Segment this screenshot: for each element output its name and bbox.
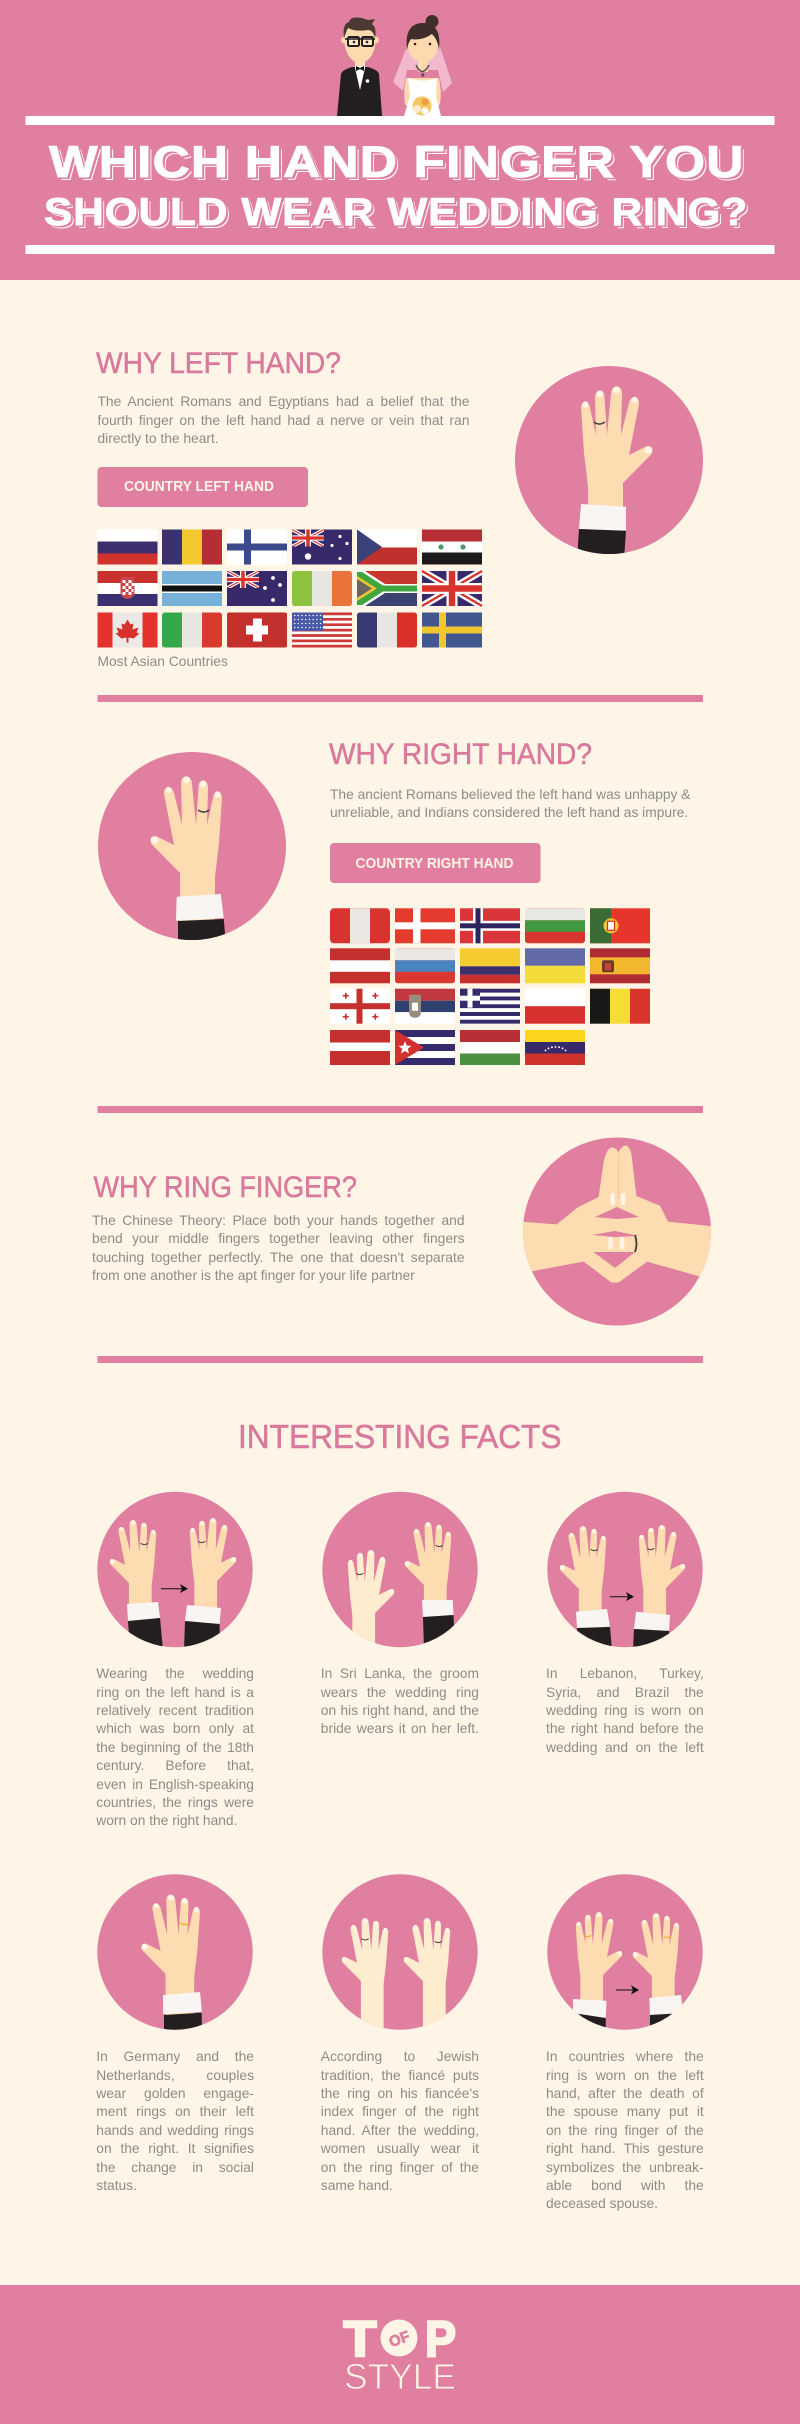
flag: Russia xyxy=(395,948,455,983)
button: country right hand xyxy=(330,843,540,883)
flag: Czech Republic xyxy=(357,530,417,564)
text: fact six: symbolizes the unbreak- xyxy=(546,2160,704,2175)
text: why right hand explanation xyxy=(330,786,710,823)
icon: hand with gold ring xyxy=(97,1874,253,2030)
flag: Botswana xyxy=(162,571,222,606)
panel: interesting facts xyxy=(96,1418,704,2215)
flag: Switzerland xyxy=(227,612,287,648)
flag: Ukraine xyxy=(525,948,585,983)
flag: Italy xyxy=(162,612,222,648)
icon: two hands with arrow xyxy=(97,1492,253,1659)
title xyxy=(0,130,800,242)
divider xyxy=(98,1356,703,1363)
text: fact four: on the right. It signifies xyxy=(96,2141,254,2156)
icon: right hand circle xyxy=(98,752,286,940)
text: fact five: women usually wear it xyxy=(321,2141,479,2156)
icon: bride xyxy=(393,15,452,116)
flag: Austria xyxy=(330,1030,390,1065)
text: chinese theory: from one another is the apt finger for your life partner xyxy=(92,1268,415,1283)
icon: bride and groom hands xyxy=(322,1492,478,1648)
flag: United Kingdom xyxy=(422,571,482,606)
text: fact five: on the ring finger of the xyxy=(321,2160,479,2175)
text: fact one xyxy=(96,1665,254,1833)
text: fact six: ring is worn on the left xyxy=(546,2068,704,2083)
flag: Canada xyxy=(98,612,158,648)
text: fact four xyxy=(96,2048,254,2197)
flag: Syria xyxy=(422,530,482,564)
flag: Peru xyxy=(330,908,390,943)
header banner xyxy=(0,0,800,280)
flag: Cuba xyxy=(395,1030,455,1065)
text: fact five: tradition, the fiancé puts xyxy=(321,2068,479,2083)
top rule xyxy=(26,116,774,125)
flag: Australia xyxy=(292,530,352,564)
icon: left hand circle xyxy=(515,366,703,554)
text: fact one: worn on the right hand. xyxy=(96,1813,237,1828)
title: SHOULD WEAR WEDDING RING? xyxy=(44,191,748,234)
logo: top of style xyxy=(344,2311,456,2397)
fact: germany and netherlands xyxy=(96,1874,254,2197)
text: fact one: which was born only at xyxy=(96,1721,254,1736)
text: fact three: the right hand before the xyxy=(546,1721,704,1736)
fact: lebanon turkey syria brazil xyxy=(546,1492,704,1758)
text: fact two: In Sri Lanka, the groom xyxy=(321,1666,479,1681)
button: country right hand: COUNTRY RIGHT HAND xyxy=(356,856,514,872)
text: fact six: on the ring finger of the xyxy=(546,2123,704,2138)
logo: top of style: P xyxy=(425,2311,456,2367)
text: chinese theory xyxy=(92,1212,464,1287)
flag: Bulgaria xyxy=(525,908,585,943)
text: fact six xyxy=(546,2048,704,2215)
text: fact one: the beginning of the 18th xyxy=(96,1740,254,1755)
text: fact six: deceased spouse. xyxy=(546,2196,658,2211)
text: why right hand explanation: The ancient Romans believed the left hand was unhappy & xyxy=(330,787,690,802)
text: fact one: countries, the rings were xyxy=(96,1795,254,1810)
icon: hands together circle xyxy=(520,1138,715,1326)
icon: two bride hands xyxy=(322,1874,478,2030)
text: fact three xyxy=(546,1665,704,1758)
text: chinese theory: The Chinese Theory: Place both your hands together and xyxy=(92,1213,464,1228)
text: fact four: ment rings on their left xyxy=(96,2104,254,2119)
text: fact two xyxy=(321,1665,479,1740)
flag: Russia xyxy=(98,530,158,564)
flag: Belgium xyxy=(590,989,650,1024)
heading: why right hand: WHY RIGHT HAND? xyxy=(329,738,592,771)
flag: Norway xyxy=(460,908,520,943)
text: fact five: index finger of the right xyxy=(321,2104,479,2119)
text: fact four: hands and wedding rings xyxy=(96,2123,254,2138)
fact: sri lanka xyxy=(321,1492,479,1740)
fact: after death of spouse xyxy=(546,1874,704,2215)
flag: Portugal xyxy=(590,908,650,943)
text: fact one: ring on the left hand is a xyxy=(96,1685,254,1700)
flag: Finland xyxy=(227,530,287,564)
bottom rule xyxy=(26,245,774,254)
text: fact four: In Germany and the xyxy=(96,2049,254,2064)
icon: two hands with arrow xyxy=(547,1492,703,1665)
flag: Denmark xyxy=(395,908,455,943)
flag: Ireland xyxy=(292,571,352,606)
panel: why left hand xyxy=(96,347,703,672)
flags: left hand countries xyxy=(98,530,482,648)
flag: Venezuela xyxy=(525,1030,585,1065)
text: fact five: the ring on his fiancée's xyxy=(321,2086,479,2101)
text: fact three: wedding and on the left xyxy=(546,1740,704,1755)
heading: interesting facts: INTERESTING FACTS xyxy=(238,1418,562,1455)
logo: top of style: OF xyxy=(387,2328,412,2351)
flag: Poland xyxy=(525,989,585,1024)
text: why right hand explanation: unreliable, and Indians considered the left hand as impure. xyxy=(330,805,688,820)
text: fact four: status. xyxy=(96,2178,137,2193)
text: fact four: Netherlands, couples xyxy=(96,2068,254,2083)
footer xyxy=(0,2285,800,2424)
text: fact one: even in English-speaking xyxy=(96,1777,254,1792)
flag: Sweden xyxy=(422,612,482,648)
flag: United States xyxy=(292,612,352,648)
text: fact five: hand. After the wedding, xyxy=(321,2123,479,2138)
caption: most asian countries: Most Asian Countries xyxy=(98,654,228,669)
flag: Georgia xyxy=(330,989,390,1024)
divider xyxy=(98,1106,703,1113)
flag: France xyxy=(357,612,417,648)
title: WHICH HAND FINGER YOU xyxy=(49,138,745,187)
text: fact six: In countries where the xyxy=(546,2049,704,2064)
heading: why left hand: WHY LEFT HAND? xyxy=(96,347,341,380)
fact: left hand tradition xyxy=(96,1492,254,1833)
flag: Greece xyxy=(460,989,520,1024)
flag: Romania xyxy=(162,530,222,564)
text: fact one: Wearing the wedding xyxy=(96,1666,254,1681)
text: fact three: In Lebanon, Turkey, xyxy=(546,1666,704,1681)
button: country left hand xyxy=(98,467,308,507)
divider xyxy=(98,695,703,702)
text: fact six: right hand. This gesture xyxy=(546,2141,704,2156)
text: fact four: the change in social xyxy=(96,2160,254,2175)
text: why left hand explanation: directly to the heart. xyxy=(98,431,219,446)
text: fact three: wedding ring is worn on xyxy=(546,1703,704,1718)
heading: why ring finger: WHY RING FINGER? xyxy=(94,1171,357,1204)
text: fact six: the spouse many put it xyxy=(546,2104,704,2119)
panel: why right hand xyxy=(98,738,710,1065)
flag: Hungary xyxy=(460,1030,520,1065)
text: chinese theory: touching together perfectly. The one that doesn't separate xyxy=(92,1250,464,1265)
flag: Latvia xyxy=(330,948,390,983)
text: fact one: century. Before that, xyxy=(96,1758,254,1773)
flags: right hand countries xyxy=(330,908,650,1065)
text: fact five xyxy=(321,2048,479,2197)
text: fact four: wear golden engage- xyxy=(96,2086,254,2101)
text: why left hand explanation: The Ancient Romans and Egyptians had a belief that the xyxy=(98,394,470,409)
flag: Colombia xyxy=(460,948,520,983)
button: country left hand: COUNTRY LEFT HAND xyxy=(124,479,274,495)
text: fact two: bride wears it on her left. xyxy=(321,1721,479,1736)
text: fact six: hand, after the death of xyxy=(546,2086,704,2101)
logo: top of style: STYLE xyxy=(344,2356,456,2397)
text: fact two: wears the wedding ring xyxy=(321,1685,479,1700)
text: why left hand explanation: fourth finger on the left hand had a nerve or vein that ran xyxy=(98,413,470,428)
text: fact six: able bond with the xyxy=(546,2178,704,2193)
flag: Serbia xyxy=(395,989,455,1024)
flag: Spain xyxy=(590,948,650,983)
text: fact three: Syria, and Brazil the xyxy=(546,1685,704,1700)
flag: New Zealand xyxy=(227,571,287,606)
text: fact five: According to Jewish xyxy=(321,2049,479,2064)
text: fact five: same hand. xyxy=(321,2178,393,2193)
logo: top of style: T xyxy=(344,2311,376,2367)
icon: groom xyxy=(337,18,382,116)
text: fact two: on his right hand, and the xyxy=(321,1703,479,1718)
text: fact one: relatively recent tradition xyxy=(96,1703,254,1718)
flag: South Africa xyxy=(357,571,417,606)
panel: why ring finger xyxy=(92,1138,715,1326)
text: why left hand explanation xyxy=(98,393,470,449)
fact: jewish tradition xyxy=(321,1874,479,2197)
flag: Croatia xyxy=(98,571,158,606)
text: chinese theory: bend your middle fingers together leaving other fingers xyxy=(92,1231,464,1246)
icon: two hands with gold rings and arrow xyxy=(547,1874,703,2030)
